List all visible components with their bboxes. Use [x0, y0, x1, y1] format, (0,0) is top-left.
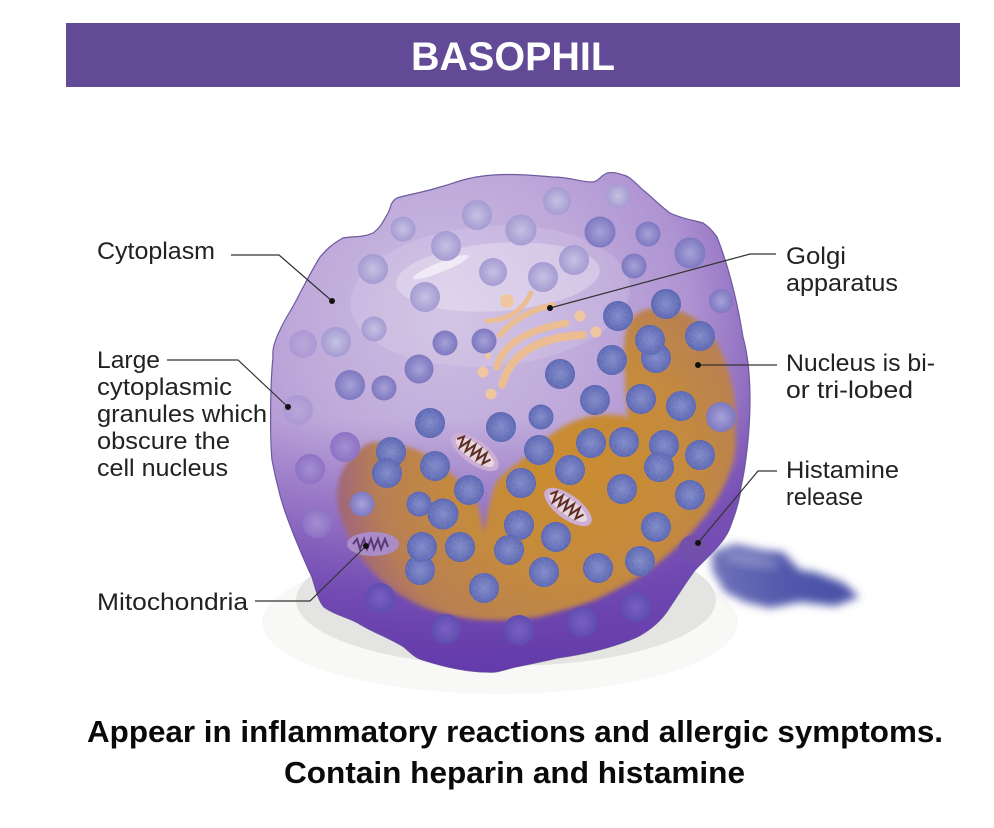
- dark speckled granules: [372, 289, 715, 603]
- label: large cytoplasmic granules: cytoplasmic: [97, 374, 232, 401]
- label: golgi apparatus: Golgi: [786, 243, 846, 270]
- lower membrane granules: [365, 535, 707, 645]
- golgi apparatus: [478, 293, 602, 400]
- label: large cytoplasmic granules: granules which: [97, 401, 267, 428]
- shadow under cell: [262, 534, 738, 694]
- footer text: Appear in inflammatory reactions and allergic symptoms.: [87, 714, 943, 749]
- mitochondrion: upper: [445, 426, 505, 478]
- label: mitochondria: [97, 543, 369, 616]
- label: cytoplasm: [97, 238, 335, 304]
- label: large cytoplasmic granules: obscure the: [97, 428, 230, 455]
- cell body: cytoplasm: [271, 173, 750, 672]
- label: large cytoplasmic granules: Large: [97, 347, 160, 374]
- mitochondrion: lower left: [347, 532, 399, 556]
- label: cytoplasm: Cytoplasm: [97, 238, 215, 265]
- footer text: Contain heparin and histamine: [284, 755, 745, 790]
- label: nucleus: [695, 350, 935, 404]
- basophil cell: [271, 173, 750, 672]
- label: large cytoplasmic granules: cell nucleus: [97, 455, 228, 482]
- pale granules: [321, 184, 630, 357]
- label: golgi apparatus: [547, 243, 898, 311]
- label: golgi apparatus: apparatus: [786, 270, 898, 297]
- medium granules: [335, 216, 736, 516]
- mitochondrion: centre: [538, 481, 598, 533]
- title banner: [66, 23, 960, 87]
- label: nucleus: Nucleus is bi-: [786, 350, 935, 377]
- faint edge granules: [283, 330, 360, 538]
- label: histamine release: Histamine: [786, 457, 899, 484]
- footer text: [87, 714, 943, 790]
- label: large cytoplasmic granules: [97, 347, 291, 482]
- label: nucleus: or tri-lobed: [786, 377, 913, 404]
- label: histamine release: release: [786, 484, 863, 511]
- title banner: BASOPHIL: [411, 35, 615, 79]
- nucleus: [337, 308, 736, 620]
- label: mitochondria: Mitochondria: [97, 589, 249, 616]
- label: histamine release: [695, 457, 899, 546]
- cytoplasm highlight: [345, 216, 635, 376]
- histamine release cloud: [712, 544, 859, 608]
